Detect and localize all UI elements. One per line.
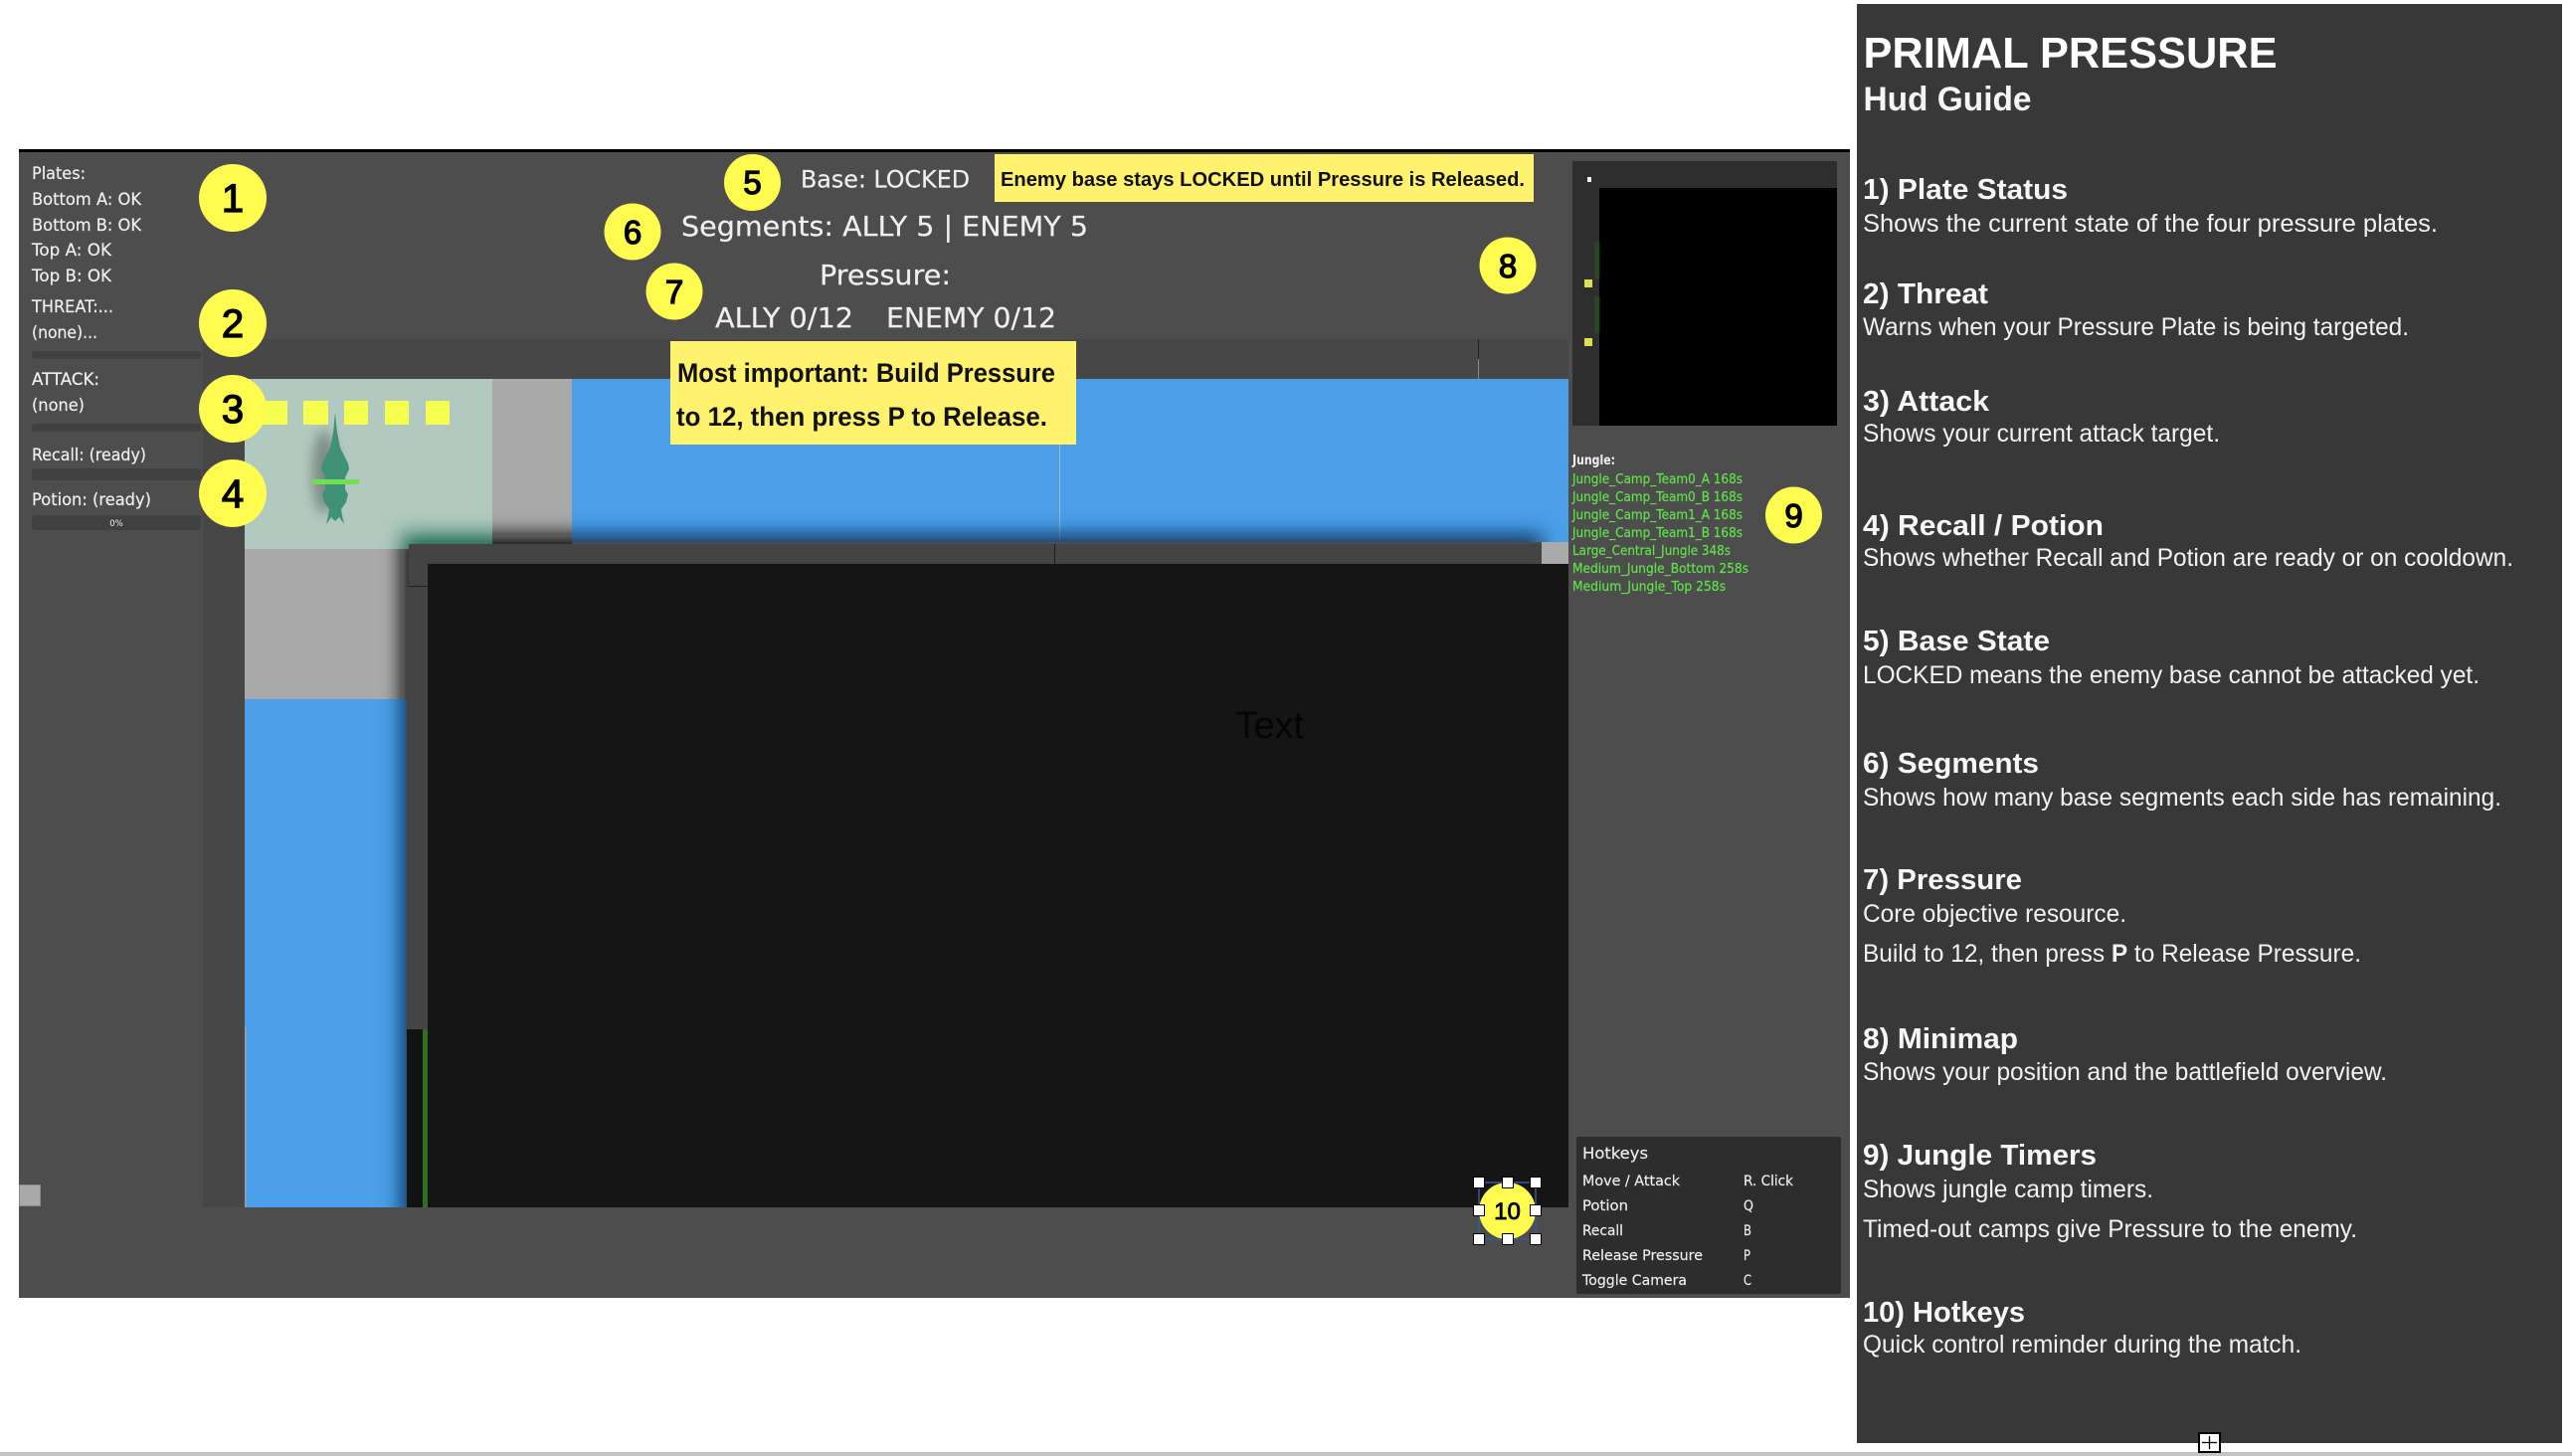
hotkeys panel: Hotkeys: [1582, 1144, 1648, 1163]
guide item 5: 5) Base State: [1863, 626, 2050, 657]
guide item 6: [1863, 748, 2501, 812]
marker 7: [646, 263, 702, 320]
callout: most important: to 12, then press P to Release.: [676, 402, 1047, 432]
guide item 7: Build to 12, then press P to Release Pressure.: [1863, 940, 2361, 968]
callout: most important: [670, 341, 1076, 445]
marker 7: 7: [665, 273, 683, 310]
guide item 6: Shows how many base segments each side has remaining.: [1863, 784, 2501, 812]
guide item 8: [1863, 1023, 2387, 1086]
guide item 9: Timed-out camps give Pressure to the enemy.: [1863, 1215, 2357, 1243]
guide item 9: [1863, 1140, 2357, 1243]
jungle timers list: Large_Central_Jungle 348s: [1572, 544, 1731, 559]
panel: game HUD screenshot: [19, 149, 1850, 1298]
hotkeys panel: Toggle Camera: [1581, 1273, 1687, 1289]
callout: enemy base: [995, 154, 1534, 202]
marker 4: 4: [222, 472, 244, 516]
guide item 1: [1863, 174, 2438, 238]
jungle timers list: Jungle_Camp_Team1_B 168s: [1571, 526, 1743, 541]
arena: [203, 339, 1568, 1258]
marker 2: [199, 289, 267, 357]
jungle timers list: Medium_Jungle_Bottom 258s: [1572, 562, 1748, 577]
hotkeys panel: C: [1744, 1273, 1751, 1289]
guide item 10: [1863, 1297, 2301, 1359]
marker 10 with selection handles: 10: [1494, 1198, 1521, 1225]
hotkeys panel: B: [1744, 1223, 1751, 1239]
minimap: [1572, 161, 1837, 426]
text: threat: (none)...: [32, 323, 97, 343]
text: plate status: Top A: OK: [31, 241, 112, 261]
text: recall: Recall: (ready): [32, 446, 146, 465]
marker 10 with selection handles: [1474, 1178, 1542, 1245]
hotkeys panel: Release Pressure: [1582, 1248, 1703, 1264]
bottom window strip: [0, 1452, 2572, 1456]
guide item 2: [1863, 278, 2409, 341]
text: threat: [31, 297, 201, 359]
marker 8: [1480, 237, 1536, 294]
plate markers: [263, 401, 450, 425]
text: potion: Potion: (ready): [32, 490, 151, 510]
guide item 4: 4) Recall / Potion: [1863, 510, 2104, 542]
dark overlay frame: [407, 542, 1568, 1207]
icon: plus handle: [2199, 1433, 2220, 1452]
text: attack: ATTACK:: [32, 370, 99, 390]
text: attack: (none): [32, 396, 85, 416]
marker 1: [199, 164, 267, 232]
marker 6: 6: [624, 214, 642, 251]
guide item 8: Shows your position and the battlefield overview.: [1863, 1058, 2387, 1086]
text: plate status: [31, 164, 142, 286]
jungle timers list: Jungle:: [1571, 454, 1615, 468]
jungle timers list: Jungle_Camp_Team0_B 168s: [1571, 490, 1743, 505]
guide item 4: Shows whether Recall and Potion are ready or on cooldown.: [1863, 544, 2513, 572]
jungle timers list: Jungle_Camp_Team0_A 168s: [1571, 472, 1743, 487]
jungle timers list: Medium_Jungle_Top 258s: [1572, 580, 1726, 595]
hotkeys panel: R. Click: [1744, 1174, 1794, 1189]
hotkeys panel: Potion: [1582, 1198, 1628, 1214]
guide item 8: 8) Minimap: [1863, 1023, 2018, 1055]
title: PRIMAL PRESSURE: [1864, 29, 2278, 78]
guide item 4: [1863, 510, 2513, 572]
guide item 6: 6) Segments: [1863, 748, 2039, 780]
marker 3: 3: [222, 388, 244, 432]
callout: most important: Most important: Build Pressure: [677, 358, 1055, 388]
jungle timers list: [1571, 454, 1748, 595]
hotkeys panel: [1576, 1137, 1841, 1294]
placeholder text in overlay: Text: [1235, 705, 1304, 747]
text: segments: Segments: ALLY 5 | ENEMY 5: [681, 210, 1088, 243]
marker 1: 1: [222, 177, 244, 221]
text: recall: [32, 446, 201, 480]
marker 4: [199, 459, 267, 527]
text: pressure: ENEMY 0/12: [886, 301, 1056, 334]
small gray square: [20, 1185, 40, 1205]
guide item 2: Warns when your Pressure Plate is being targeted.: [1863, 313, 2409, 341]
marker 3: [199, 375, 267, 443]
marker 5: [724, 154, 781, 211]
text: potion: [32, 490, 201, 530]
guide item 3: Shows your current attack target.: [1863, 420, 2220, 448]
jungle timers list: Jungle_Camp_Team1_A 168s: [1571, 508, 1743, 523]
text: potion: 0%: [109, 519, 123, 529]
text: pressure: ALLY 0/12: [715, 301, 853, 334]
text: plate status: Bottom B: OK: [32, 216, 142, 236]
text: threat: THREAT:...: [31, 297, 113, 317]
marker 6: [605, 203, 660, 261]
hotkeys panel: Recall: [1582, 1223, 1623, 1239]
hotkeys panel: Move / Attack: [1582, 1174, 1681, 1189]
guide item 5: [1863, 626, 2480, 689]
text: plate status: Top B: OK: [31, 267, 112, 286]
guide item 2: 2) Threat: [1863, 278, 1988, 310]
text: pressure: Pressure:: [820, 259, 951, 291]
text: plate status: Plates:: [32, 164, 86, 184]
callout: enemy base: Enemy base stays LOCKED until Pressure is Released.: [1001, 168, 1525, 191]
guide item 3: 3) Attack: [1863, 386, 1990, 418]
guide item 3: [1863, 386, 2220, 448]
guide item 7: Core objective resource.: [1863, 900, 2126, 928]
hotkeys panel: P: [1744, 1248, 1750, 1264]
marker 2: 2: [222, 302, 244, 346]
marker 5: 5: [743, 164, 762, 201]
guide item 7: [1863, 864, 2361, 968]
text: pressure: [715, 259, 1056, 334]
guide item 1: Shows the current state of the four pressure plates.: [1863, 210, 2438, 238]
guide item 10: Quick control reminder during the match.: [1863, 1331, 2301, 1359]
text: base state: Base: LOCKED: [801, 165, 970, 193]
guide item 1: 1) Plate Status: [1863, 174, 2068, 206]
guide item 5: LOCKED means the enemy base cannot be attacked yet.: [1863, 661, 2480, 689]
marker 8: 8: [1499, 248, 1517, 284]
subtitle: Hud Guide: [1864, 81, 2031, 118]
guide item 9: 9) Jungle Timers: [1863, 1140, 2097, 1172]
marker 9: [1765, 487, 1822, 543]
creature player character: [312, 413, 359, 524]
guide item 9: Shows jungle camp timers.: [1863, 1176, 2153, 1203]
marker 9: 9: [1784, 497, 1803, 534]
guide item 7: 7) Pressure: [1863, 864, 2022, 896]
text: attack: [32, 370, 201, 432]
text: plate status: Bottom A: OK: [32, 190, 142, 210]
hotkeys panel: Q: [1744, 1198, 1753, 1214]
guide item 10: 10) Hotkeys: [1863, 1297, 2025, 1329]
panel: hud guide sidebar: [1857, 4, 2562, 1443]
